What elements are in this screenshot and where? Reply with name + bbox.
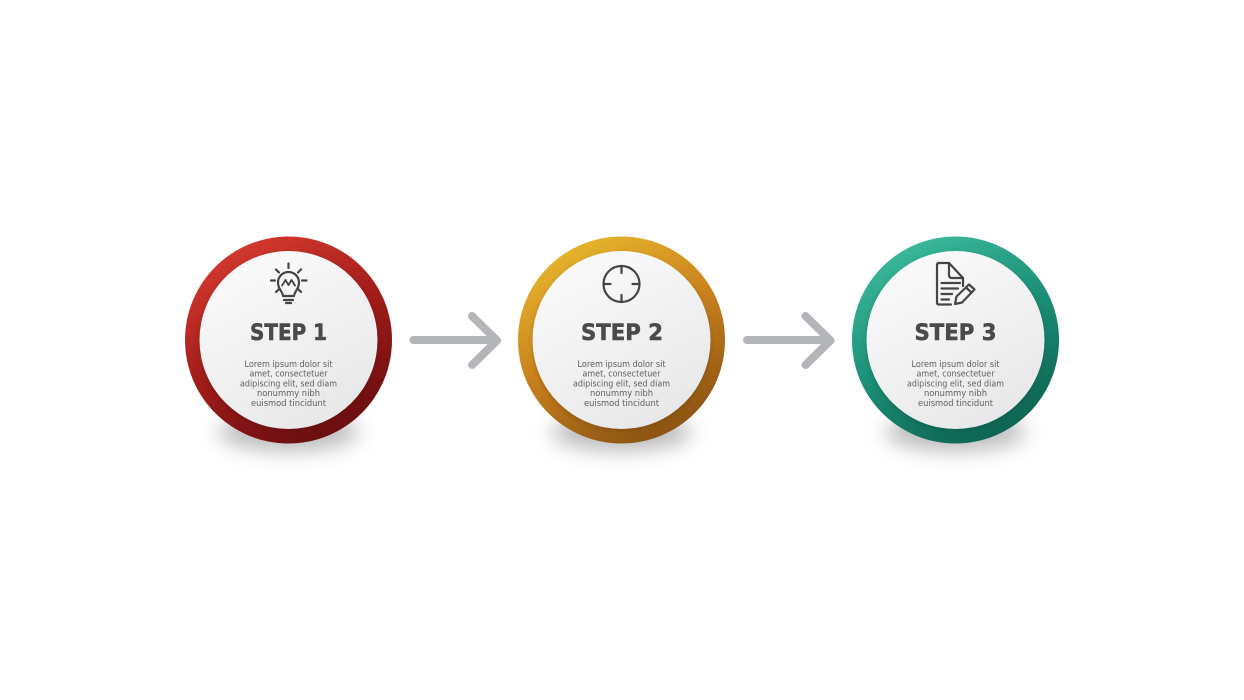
icon: document and pencil — [937, 263, 974, 304]
step 1 panel — [185, 236, 392, 451]
step 1 face — [200, 251, 378, 429]
step 2 shadow — [552, 413, 692, 451]
step 3 description: adipiscing elit, sed diam — [907, 379, 1004, 389]
step 3 heading: STEP 3 — [914, 320, 996, 346]
step 2 description: euismod tincidunt — [584, 399, 660, 409]
step 2 description — [573, 360, 670, 409]
step 1 description — [240, 360, 337, 409]
step 1 description: euismod tincidunt — [251, 399, 327, 409]
step 2 ring shade — [532, 253, 710, 431]
arrow 2 — [747, 316, 830, 365]
step 3 description: nonummy nibh — [924, 389, 987, 399]
step 1 heading: STEP 1 — [250, 320, 327, 346]
icon: target — [604, 266, 640, 302]
step 2 panel — [518, 236, 725, 451]
step 3 description: Lorem ipsum dolor sit — [912, 360, 1000, 370]
step 3 ring — [852, 236, 1059, 444]
step 1 description: Lorem ipsum dolor sit — [244, 360, 333, 370]
step 2 ring — [518, 236, 725, 444]
step 2 description: nonummy nibh — [590, 389, 653, 399]
step 2 face — [532, 251, 710, 429]
step 2 heading: STEP 2 — [581, 320, 663, 346]
step 3 description — [907, 360, 1004, 409]
step 3 description: euismod tincidunt — [918, 399, 994, 409]
step 1 description: nonummy nibh — [257, 389, 320, 399]
arrow 1 — [414, 316, 497, 365]
step 3 shadow — [886, 413, 1026, 451]
step 1 ring — [185, 236, 392, 444]
step 2 description: amet, consectetuer — [582, 370, 661, 380]
step 3 face — [866, 251, 1044, 429]
icon: light bulb — [271, 264, 306, 303]
step 1 description: amet, consectetuer — [250, 370, 328, 380]
step 2 description: Lorem ipsum dolor sit — [578, 360, 666, 370]
step 3 description: amet, consectetuer — [916, 370, 995, 380]
step 3 ring shade — [866, 253, 1044, 431]
step 3 panel — [852, 236, 1059, 451]
step 1 description: adipiscing elit, sed diam — [240, 379, 337, 389]
step 1 shadow — [218, 413, 358, 451]
step 2 description: adipiscing elit, sed diam — [573, 379, 670, 389]
step 1 ring shade — [200, 253, 378, 431]
